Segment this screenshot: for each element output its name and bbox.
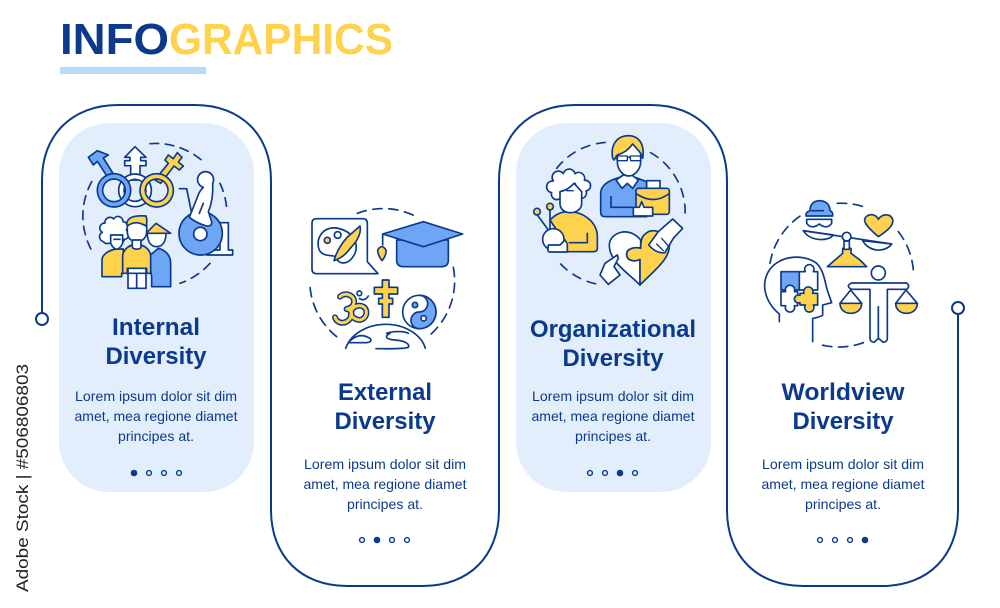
body text: external: Lorem ipsum dolor sit dim [304,456,466,472]
title [60,15,393,64]
body text: organizational: Lorem ipsum dolor sit dim [532,388,694,404]
body text: internal: amet, mea regione diamet [74,408,238,424]
body text: worldview: principes at. [805,496,881,512]
icon: worldview diversity [765,201,917,347]
title: INFO [60,15,169,64]
body text: external: principes at. [347,496,423,512]
title underline [60,67,206,74]
heading: Organizational Diversity: Organizational [530,316,696,343]
stock id side label: Adobe Stock | #506806803 [13,364,32,592]
body text: external: amet, mea regione diamet [304,476,467,492]
body text: worldview: Lorem ipsum dolor sit dim [762,456,924,472]
pagination dots: external [360,537,409,543]
heading: External Diversity: Diversity [334,408,436,435]
panel background: internal [59,123,254,492]
heading: Worldview Diversity: Worldview [782,379,905,406]
heading: External Diversity [334,379,436,435]
pagination dots: organizational [588,470,637,476]
heading: Internal Diversity [106,314,207,370]
heading: Worldview Diversity: Diversity [792,408,894,435]
body text: internal: principes at. [118,428,194,444]
pagination dots: worldview [818,537,868,543]
heading: Worldview Diversity [782,379,905,435]
body text: external [304,456,467,512]
body text: organizational: amet, mea regione diamet [532,408,695,424]
heading: Internal Diversity: Internal [112,314,200,341]
continuous panel outline [36,105,964,586]
icon: internal diversity [83,143,233,288]
body text: worldview: amet, mea regione diamet [762,476,925,492]
title: GRAPHICS [169,15,393,64]
heading: External Diversity: External [338,379,432,406]
body text: worldview [762,456,925,512]
heading: Organizational Diversity [530,316,696,372]
pagination dots: internal [131,470,181,476]
icon: external diversity [310,209,463,349]
heading: Organizational Diversity: Diversity [562,345,664,372]
heading: Internal Diversity: Diversity [106,343,207,370]
body text: organizational: principes at. [575,428,651,444]
body text: internal: Lorem ipsum dolor sit dim [75,388,237,404]
panel background: organizational [516,123,711,492]
body text: organizational [532,388,695,444]
body text: internal [74,388,238,444]
icon: organizational diversity [534,136,685,285]
